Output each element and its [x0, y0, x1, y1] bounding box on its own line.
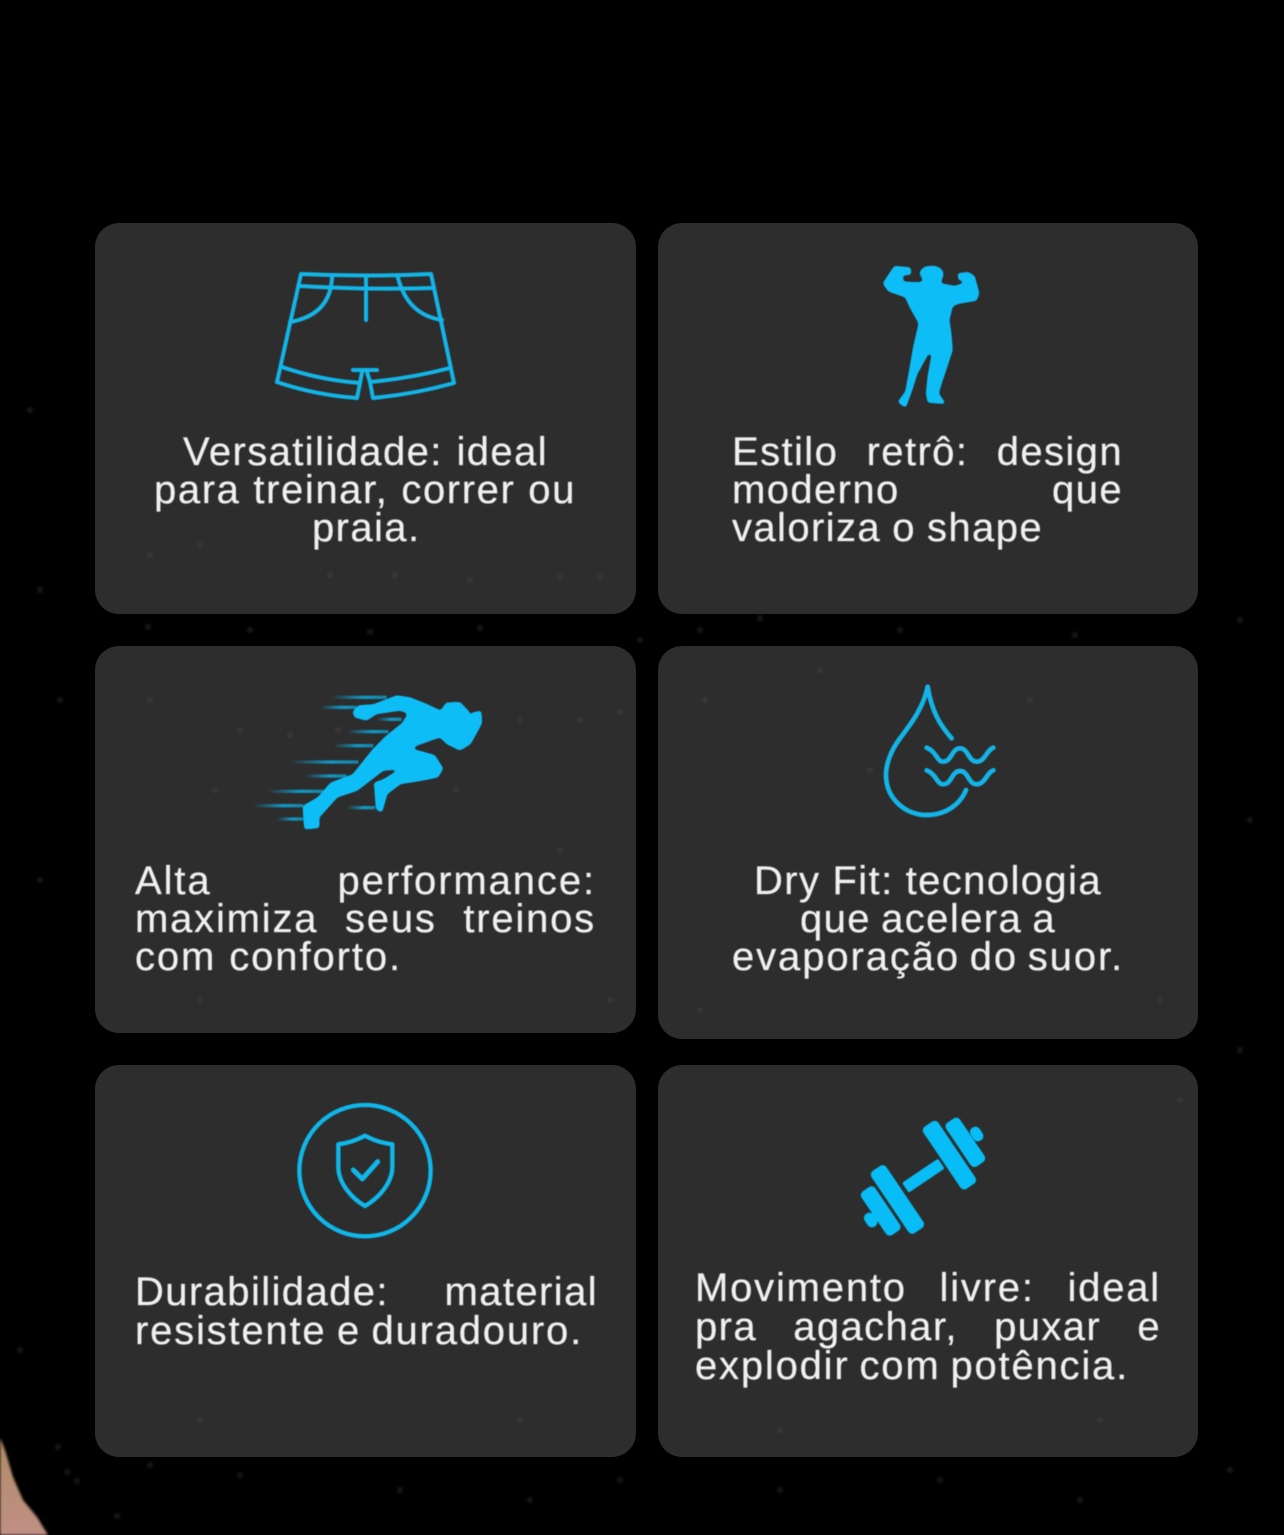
- text: alta performance: treinos: [463, 897, 596, 941]
- text: movimento livre: potência.: [950, 1344, 1129, 1388]
- text: movimento livre: agachar,: [793, 1305, 958, 1349]
- text: estilo retro: shape: [927, 506, 1043, 550]
- text: movimento livre: pra: [695, 1305, 757, 1349]
- text: alta performance: com: [135, 935, 216, 979]
- text: movimento livre: puxar: [994, 1305, 1101, 1349]
- text: versatilidade: para: [154, 468, 240, 512]
- text: estilo retro: retrô:: [867, 430, 968, 474]
- text: movimento livre: livre:: [940, 1266, 1035, 1310]
- panel: dry fit: [658, 646, 1198, 1039]
- text: durabilidade: resistente: [135, 1309, 326, 1353]
- text: durabilidade: e: [337, 1309, 361, 1353]
- text: alta performance: conforto.: [229, 935, 402, 979]
- text: versatilidade: ideal: [456, 430, 548, 474]
- text: versatilidade: praia.: [312, 506, 420, 550]
- text: estilo retro: moderno: [732, 468, 900, 512]
- text: dry fit: do: [970, 935, 1018, 979]
- text: estilo retro: Estilo: [732, 430, 838, 474]
- panel: movimento livre: [658, 1065, 1198, 1457]
- text: alta performance: maximiza: [135, 897, 318, 941]
- text: durabilidade: material: [445, 1270, 598, 1314]
- text: estilo retro: valoriza: [732, 506, 881, 550]
- text: dry fit: Fit:: [832, 859, 894, 903]
- text: estilo retro: design: [997, 430, 1123, 474]
- text: dry fit: evaporação: [732, 935, 960, 979]
- panel: durabilidade: [95, 1065, 636, 1457]
- text: durabilidade: Durabilidade:: [135, 1270, 389, 1314]
- text: durabilidade: duradouro.: [372, 1309, 583, 1353]
- text: movimento livre: ideal: [1067, 1266, 1161, 1310]
- text: dry fit: tecnologia: [906, 859, 1102, 903]
- text: estilo retro: que: [1052, 468, 1123, 512]
- text: movimento livre: Movimento: [695, 1266, 907, 1310]
- hand at bottom-left corner: [0, 1438, 50, 1535]
- text: dry fit: acelera: [881, 897, 1022, 941]
- text: versatilidade: ou: [528, 468, 576, 512]
- text: versatilidade: Versatilidade:: [183, 430, 443, 474]
- text: movimento livre: com: [859, 1344, 940, 1388]
- panel: alta performance: [95, 646, 636, 1033]
- panel: estilo retro: [658, 223, 1198, 614]
- panel: versatilidade: [95, 223, 636, 614]
- text: alta performance: Alta: [135, 859, 212, 903]
- text: alta performance: performance:: [338, 859, 596, 903]
- text: dry fit: Dry: [754, 859, 820, 903]
- text: versatilidade: treinar,: [253, 468, 388, 512]
- text: movimento livre: explodir: [695, 1344, 849, 1388]
- text: alta performance: seus: [345, 897, 437, 941]
- text: estilo retro: o: [892, 506, 916, 550]
- text: dry fit: a: [1032, 897, 1056, 941]
- text: dry fit: suor.: [1028, 935, 1124, 979]
- text: movimento livre: e: [1137, 1305, 1161, 1349]
- text: dry fit: que: [800, 897, 871, 941]
- text: versatilidade: correr: [401, 468, 515, 512]
